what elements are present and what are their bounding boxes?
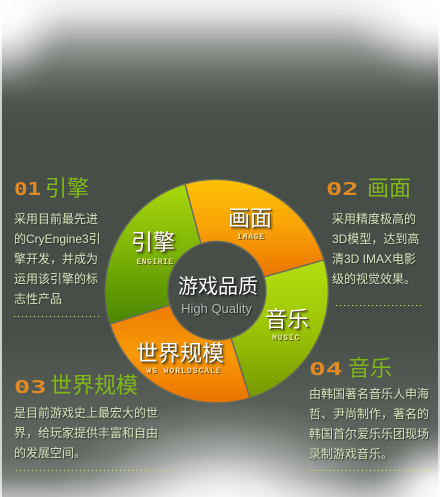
body 04 bbox=[309, 387, 430, 461]
segment: world scale bbox=[110, 305, 250, 403]
center subtitle: High Quality bbox=[181, 301, 252, 316]
heading 02: 画面 bbox=[367, 176, 411, 201]
segment: music bbox=[231, 260, 328, 398]
body 04: 录制游戏音乐。 bbox=[309, 447, 393, 461]
number 04: 04 bbox=[309, 359, 343, 380]
heading 03: 世界规模 bbox=[50, 373, 138, 398]
body 01: 志性产品 bbox=[14, 292, 62, 306]
body 04: 韩国首尔爱乐乐团现场 bbox=[309, 427, 429, 441]
body 02: 清3D IMAX电影 bbox=[332, 252, 416, 266]
body 03: 的发展空间。 bbox=[14, 446, 86, 460]
section 04 bbox=[309, 356, 431, 471]
number 02: 02 bbox=[326, 179, 359, 200]
body 03 bbox=[14, 406, 158, 460]
donut label: image: 画面 bbox=[228, 206, 272, 231]
body 02 bbox=[332, 212, 420, 286]
number 01: 01 bbox=[14, 179, 41, 200]
body 01: 的CryEngine3引 bbox=[14, 232, 101, 246]
section 01 bbox=[14, 176, 101, 317]
center title: 游戏品质 bbox=[178, 276, 258, 298]
number 03: 03 bbox=[14, 377, 47, 398]
donut sublabel: image: IMAGE bbox=[237, 233, 265, 242]
divider 02 bbox=[336, 305, 422, 306]
donut chart bbox=[105, 179, 328, 403]
body 01: 擎开发，并成为 bbox=[14, 252, 98, 266]
donut label: world scale: 世界规模 bbox=[136, 341, 224, 366]
heading 01: 引擎 bbox=[45, 176, 89, 201]
body 01 bbox=[14, 212, 101, 306]
body 04: 哲、尹尚制作，著名的 bbox=[309, 407, 429, 421]
section 02 bbox=[326, 176, 421, 306]
donut label: engine: 引擎 bbox=[131, 230, 175, 255]
divider 04 bbox=[310, 470, 432, 471]
donut label: music: 音乐 bbox=[265, 307, 309, 332]
segment: engine bbox=[105, 184, 201, 324]
heading 04: 音乐 bbox=[348, 356, 392, 381]
body 04: 由韩国著名音乐人申海 bbox=[309, 387, 429, 401]
body 01: 运用该引擎的标 bbox=[14, 272, 98, 286]
section 03 bbox=[14, 373, 169, 471]
donut sublabel: world scale: WS WORLDSCALE bbox=[146, 367, 222, 376]
body 02: 级的视觉效果。 bbox=[332, 272, 416, 286]
donut sublabel: music: MUSIC bbox=[272, 334, 300, 343]
body 02: 采用精度极高的 bbox=[332, 212, 416, 226]
body 03: 界，给玩家提供丰富和自由 bbox=[14, 426, 158, 440]
divider 01 bbox=[14, 316, 100, 317]
donut sublabel: engine: ENGIRIE bbox=[136, 258, 174, 267]
body 02: 3D模型，达到高 bbox=[332, 232, 419, 246]
segment: image bbox=[185, 179, 324, 277]
body 03: 是目前游戏史上最宏大的世 bbox=[14, 406, 158, 420]
divider 03 bbox=[16, 470, 170, 471]
body 01: 采用目前最先进 bbox=[14, 212, 98, 226]
